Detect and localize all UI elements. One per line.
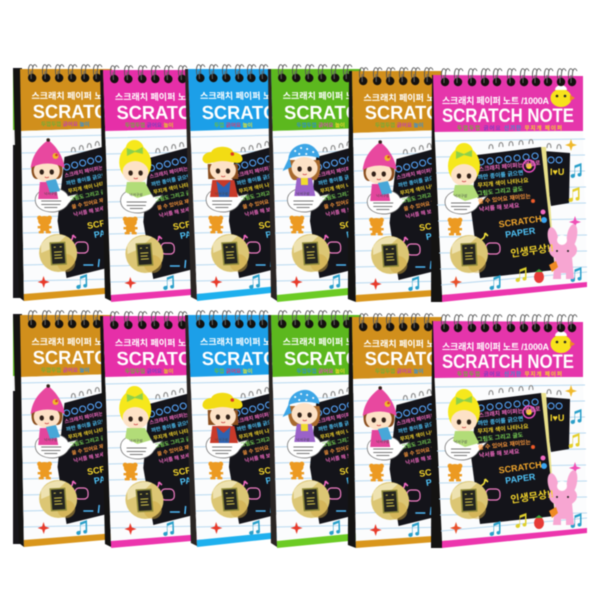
row 2 of notebooks	[13, 311, 587, 548]
scratch sheet text: 무지개 색이 나타나요	[152, 179, 199, 196]
cover product name: SCRATCH	[365, 349, 453, 370]
cover tagline: 두껍두껍 긁어요 놀이	[296, 121, 345, 129]
speech bubble text: 낙서구성	[454, 193, 467, 198]
scratch sheet text: 그림도 그리고 글도	[401, 188, 443, 205]
scratch sheet text: 쓸 수 있어요 재미있는	[403, 195, 451, 213]
scratch sheet text: 낙서를 해 보세요	[73, 449, 110, 464]
notebook: pink, row 2	[97, 312, 213, 548]
scratch sheet heading: PA	[93, 474, 107, 486]
character: pink hat girl	[30, 384, 65, 445]
scratch sheet text: 까만 종이를 긁으면	[317, 171, 359, 187]
cover product name: SCRATCH	[284, 103, 372, 124]
scratch sheet heading: SCR	[86, 218, 107, 231]
cover product name: SCRATCH	[33, 348, 121, 369]
speech bubble text: 낙서구성	[215, 437, 228, 442]
cover tagline: 두껍두껍 긁어요 놀이	[125, 367, 174, 375]
scratch sheet text: 그림도 그리고 글도	[69, 432, 111, 449]
scratch sheet text: 스크래치 페이퍼는 연필	[148, 162, 200, 180]
scratch sheet text: 스크래치 페이퍼는 연필	[148, 408, 200, 426]
scratch sheet text: 까만 종이를 긁으면	[236, 171, 278, 187]
notebook: orange, row 1	[13, 65, 125, 301]
notebook: blue, row 2	[182, 311, 299, 547]
character: yellow hat child	[202, 147, 244, 197]
scratch sheet heading: SCR	[172, 465, 193, 478]
cover title: 스크래치 페이퍼 노트	[283, 336, 362, 347]
scratch sheet text: 낙서를 해 보세요	[244, 449, 281, 464]
cover product name: SCRATCH	[201, 103, 290, 124]
character: pink hat girl	[362, 386, 397, 447]
back sheet I love U: I♥U	[550, 167, 564, 177]
scratch sheet text	[234, 407, 295, 464]
scratch sheet text: 스크래치 페이퍼는 연필	[234, 161, 285, 179]
scratch sheet text: 쓸 수 있어요 재미있는	[403, 441, 451, 459]
scratch sheet heading: SCR	[339, 218, 360, 231]
scratch sheet heading: PA	[179, 229, 193, 241]
scratch sheet text: 낙서를 해 보세요	[479, 201, 520, 213]
cover product name: SCRATCH NOTE	[442, 106, 574, 127]
speech bubble text: 낙서구성	[296, 437, 310, 442]
cover tagline: 두껍두껍 긁어요 신기한 무지개 페이퍼	[457, 370, 562, 378]
character: pink hat girl	[362, 140, 397, 201]
speech bubble text: 낙서구성	[129, 438, 143, 443]
character: blonde girl	[448, 143, 480, 201]
scratch sheet heading: PAPER	[505, 225, 536, 240]
cover tagline: 두껍두껍 긁어요 놀이	[375, 121, 424, 129]
scratch sheet text: 쓸 수 있어요 재미있는	[323, 193, 371, 211]
cover tagline: 두껍두껍 긁어요 놀이	[375, 367, 424, 375]
scratch sheet text: 무지개 색이 나타나요	[67, 178, 114, 195]
scratch sheet text	[474, 405, 546, 459]
scratch sheet text: 까만 종이를 긁으면	[317, 417, 359, 433]
back sheet I love U: I♥U	[550, 413, 564, 423]
scratch sheet heading: SCR	[258, 464, 279, 477]
character: blonde girl	[118, 386, 152, 444]
scratch sheet text: 그림도 그리고 글도	[240, 432, 282, 449]
scratch sheet heading: SCRATCH	[498, 214, 542, 229]
scratch sheet text: 낙서를 해 보세요	[325, 449, 362, 464]
scratch sheet heading: PA	[93, 228, 107, 240]
scratch sheet text: 스크래치 페이퍼는 연필	[64, 407, 115, 425]
character: blue bandana girl	[282, 390, 321, 442]
scratch sheet text: 무지개 색이 나타나요	[399, 180, 446, 197]
partially hidden green notebook, row 2	[13, 314, 22, 544]
scratch sheet text: 쓸 수 있어요 재미있는	[323, 439, 371, 457]
scratch sheet text: 스크래치 페이퍼는 연필	[234, 407, 285, 425]
cover tagline: 두껍두껍 긁어요 놀이	[41, 120, 90, 128]
notebook: orange 2, row 1	[344, 68, 457, 302]
scratch sheet text	[396, 409, 456, 466]
notebook: blue, row 1	[182, 65, 299, 301]
row 1 of notebooks	[13, 65, 587, 302]
scratch sheet heading: PA	[179, 475, 193, 487]
notebook: orange, row 2	[13, 311, 125, 547]
scratch sheet text: 까만 종이를 긁으면	[150, 172, 192, 188]
speech bubble text: 낙서구성	[44, 191, 57, 196]
cover title: 스크래치 페이퍼 노트	[283, 90, 362, 101]
cover title: 스크래치 페이퍼 노트	[363, 92, 443, 103]
scratch sheet text: 쓸 수 있어요 재미있는	[71, 193, 119, 211]
speech bubble text: 낙서구성	[215, 191, 228, 196]
scratch sheet text: 그림도 그리고 글도	[154, 433, 196, 450]
scratch sheet text: 까만 종이를 긁으면	[397, 173, 439, 189]
scratch sheet heading: SCR	[339, 464, 360, 477]
cover title: 스크래치 페이퍼 노트 /1000A	[442, 341, 550, 352]
scratch sheet text: 낙서를 해 보세요	[405, 451, 442, 466]
scratch sheet text: 낙서를 해 보세요	[244, 203, 281, 218]
scratch sheet text	[148, 162, 209, 219]
scratch sheet text: 스크래치 페이퍼는 연필	[64, 161, 115, 179]
cover tagline: 두껍두껍 긁어요 놀이	[41, 366, 90, 374]
cover tagline: 두껍 긁어요 놀이	[214, 121, 253, 129]
cover title: 스크래치 페이퍼 노트	[115, 91, 195, 102]
scratch sheet heading: SCR	[418, 220, 439, 233]
cover title: 스크래치 페이퍼 노트	[200, 336, 280, 347]
scratch sheet slogan: 인생무상!!	[510, 487, 554, 506]
cover title: 스크래치 페이퍼 노트	[115, 337, 195, 348]
scratch sheet text: 스크래치 페이퍼는 연필	[315, 407, 367, 425]
cover product name: SCRATCH	[33, 102, 121, 123]
cover product name: SCRATCH	[201, 349, 290, 370]
cover tagline: 두껍 긁어요 놀이	[214, 367, 253, 375]
scratch sheet text: 낙서를 해 보세요	[325, 203, 362, 218]
cover tagline: 두껍두껍 긁어요 신기한 무지개 페이퍼	[457, 124, 562, 132]
scratch sheet text: 무지개 색이 나타나요	[238, 178, 284, 195]
cover title: 스크래치 페이퍼 노트	[363, 338, 443, 349]
scratch sheet heading: SCR	[258, 218, 279, 231]
scratch sheet text	[64, 407, 124, 464]
scratch sheet text: 무지개 색이 나타나요	[238, 424, 284, 441]
scratch sheet text: 까만 종이를 긁으면	[477, 415, 524, 427]
scratch sheet text: 스크래치 페이퍼는 연필	[396, 163, 447, 181]
scratch sheet text: 그림도 그리고 글도	[240, 186, 282, 203]
notebook: large pink, row 1	[431, 69, 587, 302]
scratch sheet heading: PA	[425, 230, 439, 242]
scratch sheet text: 낙서를 해 보세요	[479, 447, 520, 459]
cover title: 스크래치 페이퍼 노트	[200, 90, 280, 101]
speech bubble text: 낙서구성	[376, 439, 389, 444]
speech bubble text: 낙서구성	[376, 193, 389, 198]
scratch sheet text: 까만 종이를 긁으면	[150, 418, 192, 434]
scratch sheet text: 까만 종이를 긁으면	[236, 417, 278, 433]
notebook: orange 2, row 2	[344, 314, 457, 548]
speech bubble text: 낙서구성	[454, 439, 467, 444]
scratch sheet text: 스크래치 페이퍼는 연필로	[478, 405, 541, 419]
scratch sheet text: 그림도 그리고 글도	[401, 434, 443, 451]
scratch sheet text: 낙서를 해 보세요	[73, 203, 110, 218]
scratch sheet text: 쓸 수 있어요 재미있는	[242, 193, 290, 211]
scratch sheet heading: SCR	[172, 219, 193, 232]
scratch sheet heading: SCR	[86, 464, 107, 477]
character: blonde girl	[448, 389, 480, 447]
scratch sheet text: 낙서를 해 보세요	[158, 204, 195, 219]
cover product name: SCRATCH	[284, 349, 372, 370]
cover tagline: 두껍두껍 긁어요 놀이	[296, 367, 345, 375]
scratch sheet text: 무지개 색이 나타나요	[319, 178, 366, 195]
scratch sheet text	[148, 408, 209, 465]
scratch sheet text: 그림도 그리고 글도	[477, 185, 524, 197]
speech bubble text: 낙서구성	[44, 437, 57, 442]
scratch sheet text: 그림도 그리고 글도	[477, 431, 524, 443]
scratch sheet text: 무지개 색이 나타나요	[319, 424, 366, 441]
scratch sheet heading: PA	[265, 228, 279, 240]
scratch sheet slogan: 인생무상!!	[510, 241, 554, 260]
scratch sheet heading: PA	[345, 474, 360, 486]
scratch sheet text: 무지개 색이 나타나요	[152, 425, 199, 442]
scratch sheet text: 쓸 수 있어요 재미있는	[71, 439, 119, 457]
scratch sheet heading: PA	[345, 228, 360, 240]
scratch sheet heading: PA	[425, 476, 439, 488]
character: blonde girl	[118, 140, 152, 198]
scratch sheet heading: PAPER	[505, 471, 536, 486]
scratch sheet text: 까만 종이를 긁으면	[65, 171, 107, 187]
scratch sheet text: 낙서를 해 보세요	[405, 205, 442, 220]
scratch sheet text: 무지개 색이 나타나요	[67, 424, 114, 441]
notebook: large pink, row 2	[431, 315, 587, 548]
scratch sheet text: 스크래치 페이퍼는 연필	[396, 409, 447, 427]
speech bubble text: 낙서구성	[296, 191, 310, 196]
scratch sheet text: 쓸 수 있어요 재미있는	[156, 194, 204, 212]
notebook: pink, row 1	[97, 66, 213, 302]
character: blue bandana girl	[282, 144, 321, 196]
scratch sheet text: 그림도 그리고 글도	[69, 186, 111, 203]
scratch sheet text	[234, 161, 295, 218]
scratch sheet heading: SCRATCH	[498, 460, 542, 475]
scratch sheet text	[64, 161, 124, 218]
scratch sheet text: 까만 종이를 긁으면	[65, 417, 107, 433]
scratch sheet heading: PA	[265, 474, 279, 486]
cover title: 스크래치 페이퍼 노트	[31, 90, 111, 101]
cover product name: SCRATCH	[116, 103, 205, 124]
scratch sheet text: 그림도 그리고 글도	[321, 432, 363, 449]
scratch sheet text: 쓸 수 있어요 재미있는	[242, 439, 290, 457]
scratch sheet text: 스크래치 페이퍼는 연필로	[478, 159, 541, 173]
scratch sheet text: 쓸 수 있어요 재미있는	[478, 438, 532, 451]
scratch sheet text	[315, 161, 376, 218]
scratch sheet text: 까만 종이를 긁으면	[397, 419, 439, 435]
scratch sheet text	[474, 159, 546, 213]
scratch sheet text: 까만 종이를 긁으면	[477, 169, 524, 181]
notebook: green, row 1	[265, 65, 379, 302]
scratch sheet text	[315, 407, 376, 464]
scratch sheet text: 무지개 색이 나타나요	[399, 426, 446, 443]
scratch sheet text	[396, 163, 456, 220]
cover product name: SCRATCH	[116, 349, 205, 370]
character: pink hat girl	[30, 138, 65, 199]
notebook: green, row 2	[265, 311, 379, 548]
cover product name: SCRATCH	[365, 103, 453, 124]
scratch sheet text: 무지개 색이 나타나요	[477, 176, 530, 189]
scratch sheet text: 스크래치 페이퍼는 연필	[315, 161, 367, 179]
scratch sheet text: 쓸 수 있어요 재미있는	[156, 440, 204, 458]
speech bubble text: 낙서구성	[129, 192, 143, 197]
cover title: 스크래치 페이퍼 노트 /1000A	[442, 95, 550, 106]
scratch sheet heading: SCR	[418, 466, 439, 479]
partially hidden green notebook, row 1	[13, 68, 22, 298]
scratch sheet text: 무지개 색이 나타나요	[477, 422, 530, 435]
scratch sheet text: 쓸 수 있어요 재미있는	[478, 192, 532, 205]
scratch sheet text: 그림도 그리고 글도	[154, 187, 196, 204]
scratch sheet text: 낙서를 해 보세요	[158, 450, 195, 465]
scratch sheet text: 그림도 그리고 글도	[321, 186, 363, 203]
character: yellow hat child	[202, 393, 244, 443]
cover tagline: 두껍두껍 긁어요 놀이	[125, 121, 174, 129]
cover title: 스크래치 페이퍼 노트	[31, 336, 111, 347]
cover product name: SCRATCH NOTE	[442, 352, 574, 373]
